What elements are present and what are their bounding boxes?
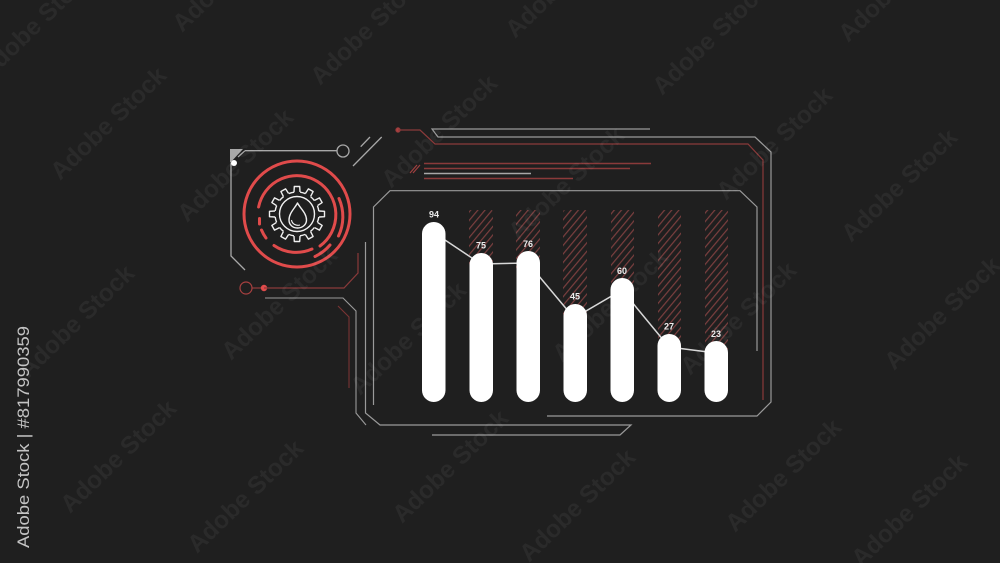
trend line [433,232,716,353]
watermarks: Adobe Stock [377,70,503,193]
value labels: 23 [711,329,721,339]
side credit text: Adobe Stock | #817990359 [15,326,33,548]
icon: gear with oil drop [270,186,324,242]
lower-left connector lines [240,253,366,425]
value labels [429,210,721,339]
watermarks: Adobe Stock [676,257,802,380]
watermarks: Adobe Stock [837,124,963,247]
value labels: 45 [570,292,580,302]
watermarks: Adobe Stock [56,395,182,518]
white bars [422,222,728,402]
value labels: 94 [429,210,439,220]
watermarks: Adobe Stock [46,62,172,185]
watermarks: Adobe Stock [712,82,838,205]
value labels: 27 [664,322,674,332]
value labels: 60 [617,266,627,276]
watermarks: Adobe Stock [183,435,309,558]
bar chart [422,210,728,402]
top-right frame lines [396,128,771,416]
watermarks: Adobe Stock [173,104,299,227]
icon: concentric red rings [244,161,350,267]
watermarks: Adobe Stock [504,122,630,245]
hatched bar backgrounds [469,210,728,360]
watermarks: Adobe Stock [721,414,847,537]
watermarks: Adobe Stock [388,405,514,528]
watermarks: Adobe Stock [346,277,472,400]
watermarks: Adobe Stock [14,260,140,383]
watermarks: Adobe Stock [217,242,343,365]
panel: chart frame [366,191,757,435]
header stripe lines [410,164,651,178]
watermarks: Adobe Stock [548,244,674,367]
top-left HUD frame [230,137,382,270]
value labels: 76 [523,239,533,249]
value labels: 75 [476,240,486,250]
